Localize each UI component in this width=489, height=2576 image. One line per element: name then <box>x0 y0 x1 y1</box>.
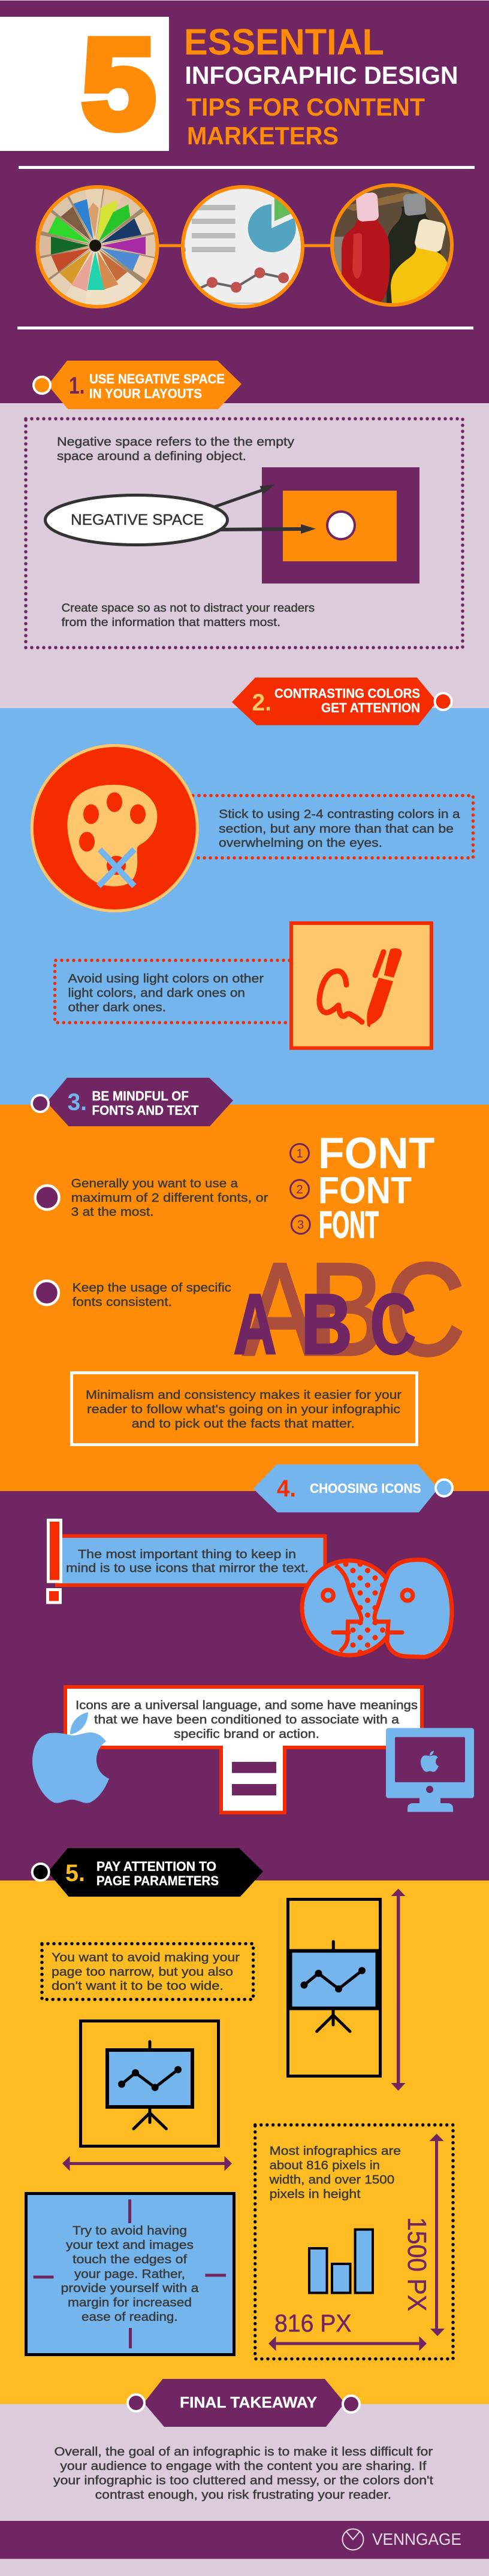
icon: monitor <box>386 1728 474 1812</box>
section 4 banner: CHOOSING ICONS <box>310 1481 421 1496</box>
margin text box: margin for increased <box>68 2296 192 2309</box>
margin text box: ease of reading. <box>82 2310 178 2324</box>
section 2 banner: GET ATTENTION <box>321 700 420 715</box>
icon: pen and signature <box>291 923 431 1048</box>
closing text: from the information that matters most. <box>61 616 280 629</box>
icon: exclamation mark <box>48 1520 61 1603</box>
dotted text box: section, but any more than that can be <box>219 822 454 836</box>
mirror text box: The most important thing to keep in <box>78 1547 296 1561</box>
overlapping ABC letters: B <box>309 1236 385 1383</box>
dotted text box two: light colors, and dark ones on <box>68 986 245 1000</box>
bullet text two: fonts consistent. <box>73 1295 172 1309</box>
footer with logo <box>0 2521 489 2559</box>
overlapping ABC letters: A <box>234 1277 277 1372</box>
takeaway text <box>53 2445 433 2502</box>
white callout box: Minimalism and consistency makes it easier for your <box>86 1388 402 1402</box>
section 5: page parameters <box>26 1848 453 2359</box>
section 2: contrasting colors <box>32 678 473 1048</box>
dimensions text: Most infographics are <box>270 2144 401 2158</box>
white callout box: reader to follow what's going on in your infographic <box>87 1402 400 1416</box>
title: MARKETERS <box>187 122 339 150</box>
image: paint bottles circle <box>331 184 453 306</box>
numbered font samples: FONT <box>318 1170 412 1212</box>
dimensions text: about 816 pixels in <box>270 2158 380 2172</box>
overlapping ABC letters <box>234 1236 465 1383</box>
dotted text box two: other dark ones. <box>68 1000 166 1014</box>
dotted panel <box>26 419 463 648</box>
title: TIPS FOR CONTENT <box>186 93 425 121</box>
dimensions text: pixels in height <box>270 2187 361 2201</box>
margin text box: your text and images <box>66 2238 194 2252</box>
width arrow <box>268 2336 427 2351</box>
margin text box <box>26 2194 234 2354</box>
margin text box: your page. Rather, <box>74 2267 185 2281</box>
takeaway banner: FINAL TAKEAWAY <box>180 2393 317 2411</box>
takeaway text: your infographic is too cluttered and messy, or the colors don't <box>53 2474 433 2487</box>
closing text <box>61 602 315 629</box>
mirror text box <box>57 1536 325 1585</box>
dotted text box: overwhelming on the eyes. <box>219 836 382 850</box>
closing text: Create space so as not to distract your readers <box>61 602 315 615</box>
dotted text box: width advice: page too narrow, but you also <box>52 1965 233 1979</box>
universal language box with equals sign: specific brand or action. <box>174 1727 319 1741</box>
section 3 banner: 3. <box>67 1089 87 1115</box>
intro text: Negative space refers to the the empty <box>57 435 295 449</box>
dotted text box <box>193 796 473 858</box>
section 1 banner: IN YOUR LAYOUTS <box>89 386 202 401</box>
section 3 banner: FONTS AND TEXT <box>92 1103 199 1118</box>
universal language box with equals sign: that we have been conditioned to associate with a <box>94 1713 400 1727</box>
numbered font samples <box>290 1129 435 1246</box>
overlapping ABC letters: B <box>301 1277 352 1372</box>
dotted panel: dimensions <box>255 2125 453 2359</box>
section 2 banner <box>232 678 452 725</box>
logo mark <box>343 2529 363 2550</box>
section 5 banner: PAY ATTENTION TO <box>96 1859 216 1874</box>
section 1: negative space <box>26 361 463 648</box>
white callout box <box>72 1373 417 1445</box>
section 4: choosing icons <box>32 1464 474 1813</box>
bullet text one: maximum of 2 different fonts, or <box>71 1191 268 1205</box>
big number 5 on white box: 5 <box>82 13 155 155</box>
bullet text one: Generally you want to use a <box>71 1177 239 1190</box>
image: analytics chart circle <box>177 186 304 308</box>
section 2 banner: 2. <box>252 690 271 716</box>
dotted text box: Stick to using 2-4 contrasting colors in a <box>219 808 460 821</box>
takeaway text: Overall, the goal of an infographic is to make it less difficult for <box>54 2445 433 2459</box>
narrow page illustration <box>288 1899 380 2076</box>
takeaway banner <box>128 2379 360 2427</box>
mirror text box: mind is to use icons that mirror the text. <box>66 1561 309 1575</box>
bullet text two <box>35 1281 231 1309</box>
dotted text box: width advice: don't want it to be too wide. <box>52 1979 224 1993</box>
icon: two faces <box>302 1560 452 1657</box>
dimensions text: width, and over 1500 <box>269 2173 394 2187</box>
section 1 banner: 1. <box>69 373 85 399</box>
title <box>184 22 458 150</box>
final takeaway <box>53 2379 433 2502</box>
numbered font samples: 3 <box>297 1219 304 1232</box>
section 1 banner: USE NEGATIVE SPACE <box>89 371 225 386</box>
title: ESSENTIAL <box>184 22 384 62</box>
dotted text box two <box>55 960 289 1023</box>
vertical arrow <box>391 1889 406 2091</box>
section 4 banner: 4. <box>277 1476 296 1502</box>
arrows from label <box>215 485 316 534</box>
takeaway text: your audience to engage with the content you are sharing. If <box>60 2459 427 2473</box>
overlapping ABC letters: A <box>243 1236 316 1383</box>
816 px label: 816 PX <box>274 2309 351 2337</box>
section 4 banner <box>253 1464 452 1512</box>
universal language box with equals sign <box>65 1687 422 1813</box>
1500 px label: 1500 PX <box>402 2217 431 2311</box>
icon: paint palette with cross <box>32 745 197 911</box>
margin text box: touch the edges of <box>73 2253 187 2266</box>
title: INFOGRAPHIC DESIGN <box>185 61 458 89</box>
wide page illustration <box>80 2021 218 2146</box>
section 3 banner <box>32 1078 233 1126</box>
overlapping ABC letters: C <box>370 1277 416 1372</box>
section 3: fonts and text <box>32 1078 465 1445</box>
intro text <box>57 435 295 463</box>
numbered font samples: FONT <box>319 1204 379 1246</box>
section 1 banner <box>34 361 242 409</box>
section 5 banner: 5. <box>65 1860 85 1886</box>
dotted text box two: Avoid using light colors on other <box>68 972 264 985</box>
negative space label <box>46 495 228 545</box>
margin text box: Try to avoid having <box>73 2224 187 2238</box>
big number 5 on white box <box>0 13 169 155</box>
height arrow <box>430 2134 445 2336</box>
dotted text box: width advice: You want to avoid making your <box>52 1951 240 1964</box>
header panel <box>0 13 475 329</box>
icon: apple logo <box>32 1712 109 1803</box>
universal language box with equals sign: Icons are a universal language, and some have meanings <box>76 1698 418 1712</box>
image: coloured pencils circle <box>36 185 159 309</box>
numbered font samples: 2 <box>296 1183 303 1196</box>
section 3 banner: BE MINDFUL OF <box>92 1089 189 1103</box>
icon: bar chart <box>309 2230 373 2293</box>
section 2 banner: CONTRASTING COLORS <box>274 686 420 701</box>
numbered font samples: 1 <box>296 1147 303 1160</box>
section 5 banner: PAGE PARAMETERS <box>96 1873 219 1888</box>
section 5 banner <box>32 1848 263 1897</box>
white callout box: and to pick out the facts that matter. <box>132 1417 355 1431</box>
intro text: space around a defining object. <box>57 449 246 463</box>
bullet text one: 3 at the most. <box>71 1205 153 1219</box>
horizontal arrow <box>62 2156 232 2171</box>
diagram: nested squares with focal circle <box>262 467 419 583</box>
negative space label: NEGATIVE SPACE <box>71 512 204 528</box>
margin text box: provide yourself with a <box>61 2281 199 2295</box>
brand name: VENNGAGE <box>372 2530 461 2548</box>
overlapping ABC letters: C <box>385 1236 465 1383</box>
dimensions text <box>269 2144 401 2201</box>
dotted text box: width advice <box>42 1943 253 2000</box>
numbered font samples: FONT <box>318 1129 435 1178</box>
bullet text two: Keep the usage of specific <box>73 1281 231 1295</box>
bullet text one <box>35 1177 268 1219</box>
takeaway text: contrast enough, you risk frustrating your reader. <box>95 2488 391 2502</box>
